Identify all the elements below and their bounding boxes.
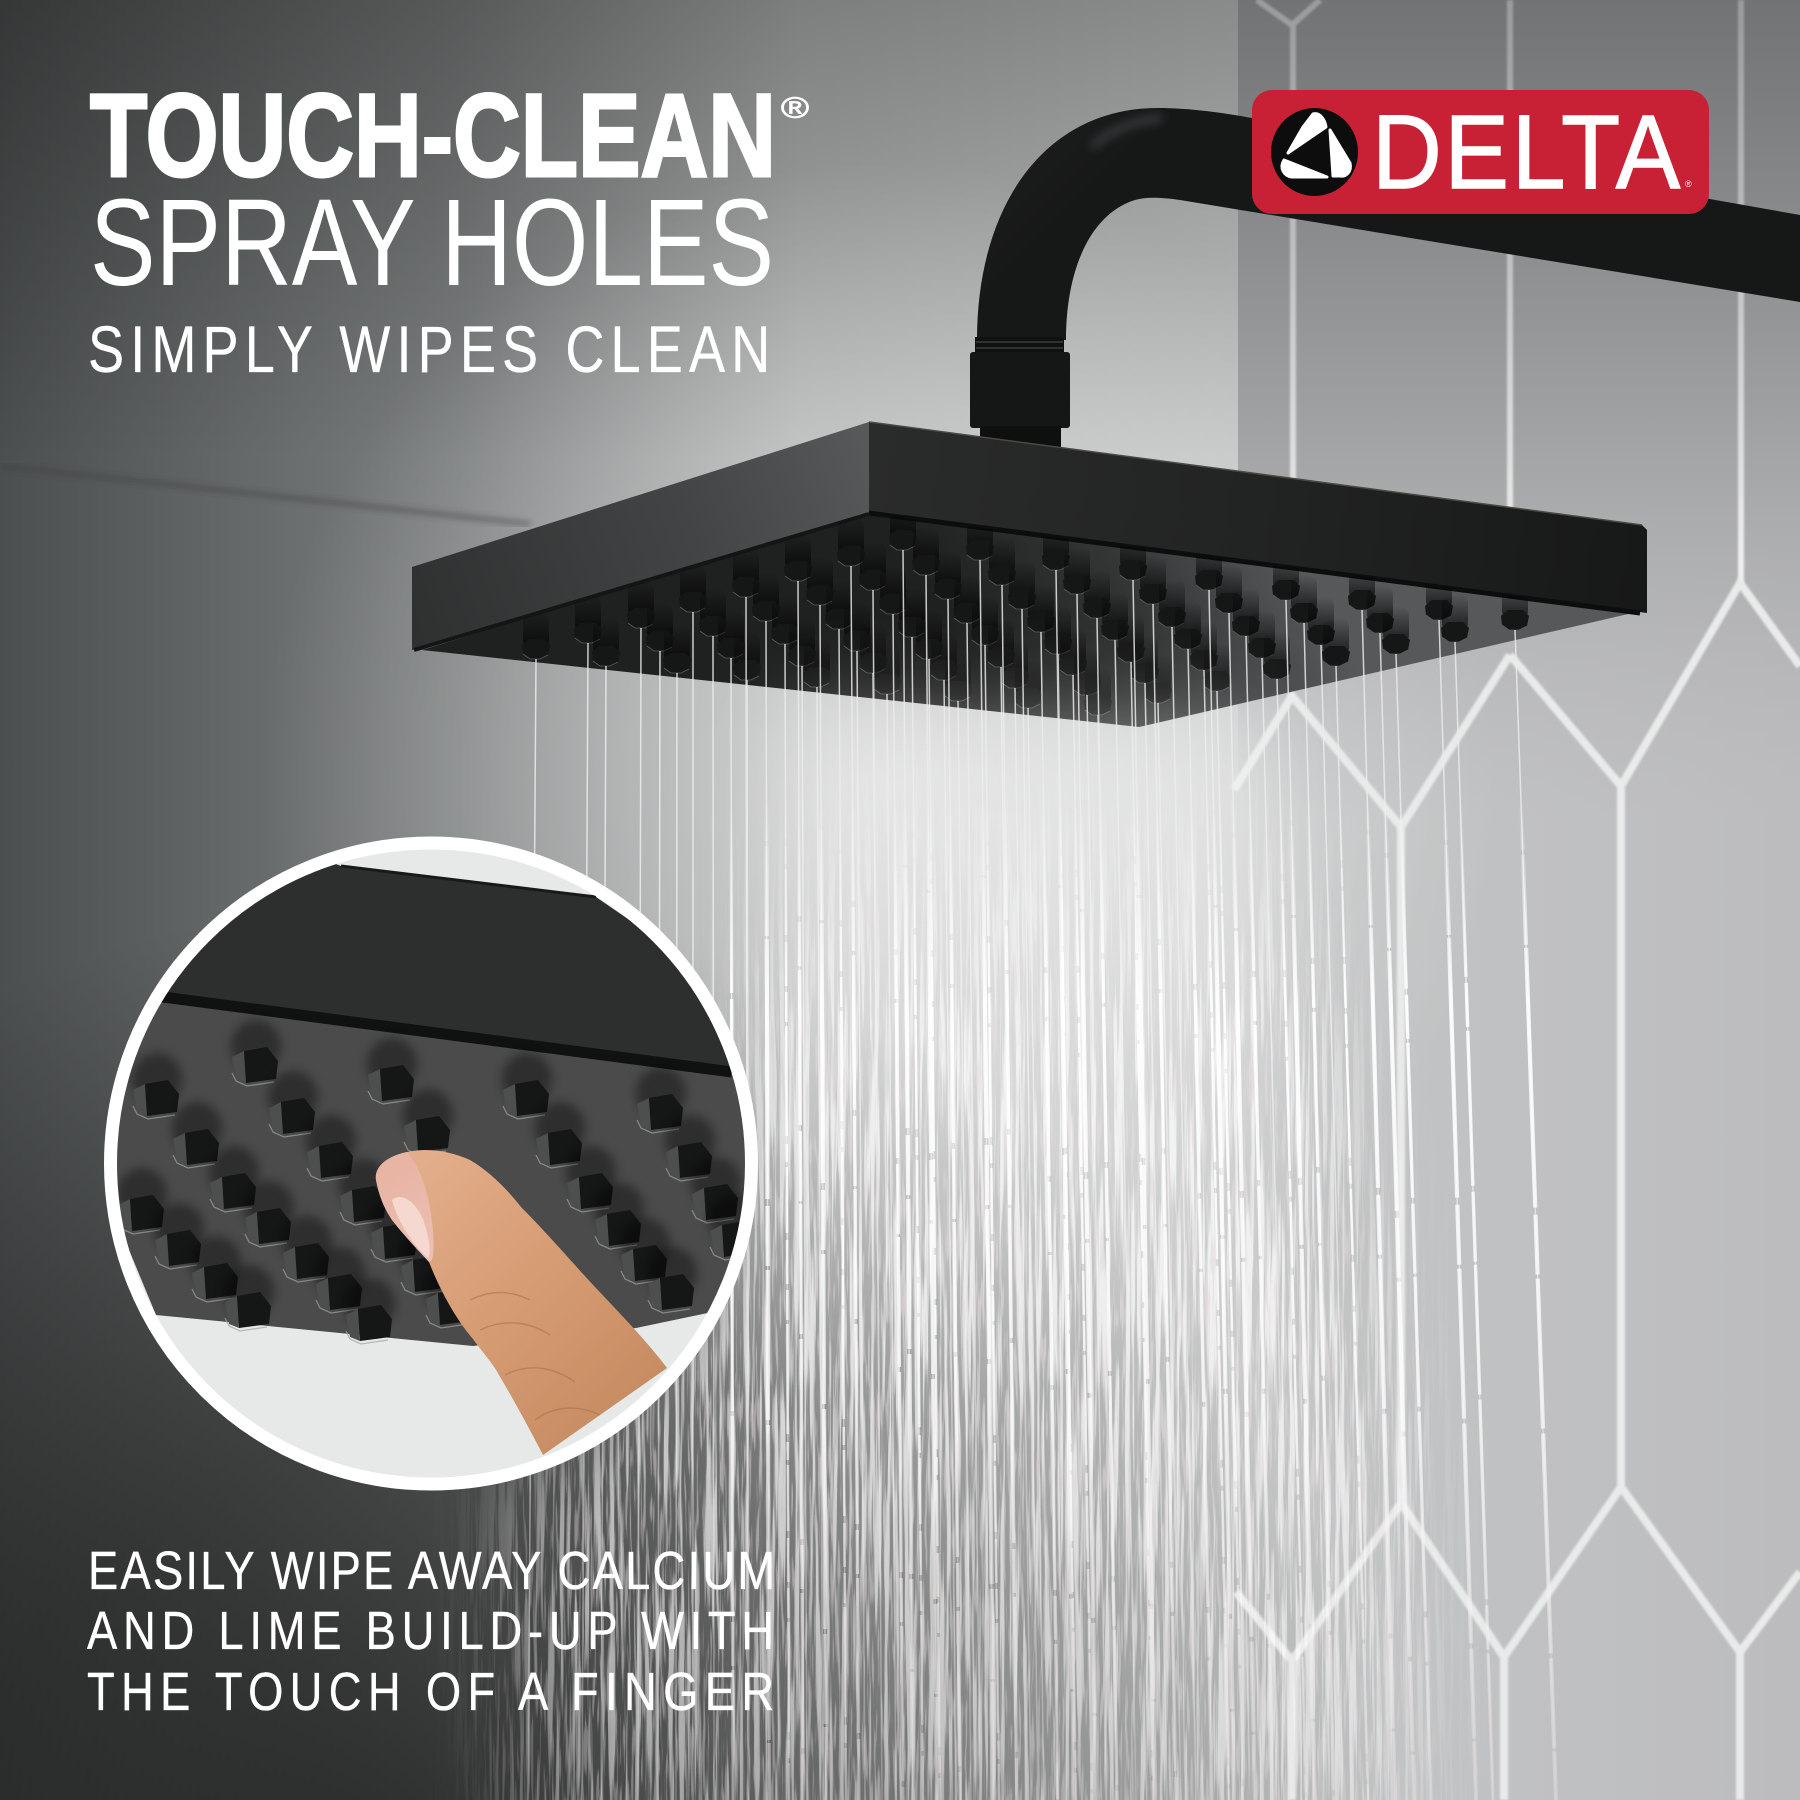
headline: touch-clean: ® bbox=[781, 92, 809, 125]
body copy: EASILY WIPE AWAY CALCIUM bbox=[88, 1540, 775, 1601]
shower arm bbox=[970, 108, 1800, 452]
spray nozzles bbox=[522, 502, 1529, 715]
inset head underside plate bbox=[100, 1000, 770, 1346]
body copy: AND LIME BUILD-UP WITH bbox=[87, 1600, 774, 1661]
bright water jets, set one bbox=[766, 550, 1556, 1800]
skin creases bbox=[470, 1292, 600, 1420]
bright water jets, set three bbox=[785, 629, 1368, 1800]
bright water jets, set two bbox=[731, 566, 1493, 1800]
headline: spray holes: SPRAY HOLES bbox=[90, 175, 774, 312]
logo mark bbox=[1271, 108, 1358, 196]
inset light background bbox=[129, 850, 732, 1478]
delta logo bbox=[1252, 90, 1709, 214]
inset head front face bbox=[168, 864, 732, 1074]
inset nozzles bbox=[117, 1020, 759, 1344]
fingernail bbox=[376, 1152, 434, 1262]
water spray bbox=[459, 550, 1558, 1800]
fine streak texture bbox=[459, 874, 1442, 1800]
inset white ring bbox=[110, 843, 752, 1484]
finger bbox=[376, 1150, 667, 1455]
head underside bbox=[422, 513, 1637, 727]
body copy bbox=[87, 1540, 775, 1722]
body copy: THE TOUCH OF A FINGER bbox=[87, 1661, 774, 1722]
headline: touch-clean: TOUCH-CLEAN bbox=[90, 70, 776, 202]
head right face bbox=[869, 422, 1647, 613]
delta logo: ® bbox=[1685, 179, 1692, 189]
logo wordmark: DELTA bbox=[1372, 94, 1681, 211]
subheading: SIMPLY WIPES CLEAN bbox=[88, 312, 770, 386]
head left face bbox=[412, 422, 869, 650]
inset circle: finger touching nozzles bbox=[100, 830, 770, 1500]
rain shower head bbox=[412, 422, 1647, 727]
hexagonal wall tile grout lines bbox=[1234, 0, 1800, 1800]
inset dark seam bbox=[110, 990, 732, 1072]
light column behind the water bbox=[790, 720, 1260, 1760]
thin water jets bbox=[528, 550, 1556, 1800]
